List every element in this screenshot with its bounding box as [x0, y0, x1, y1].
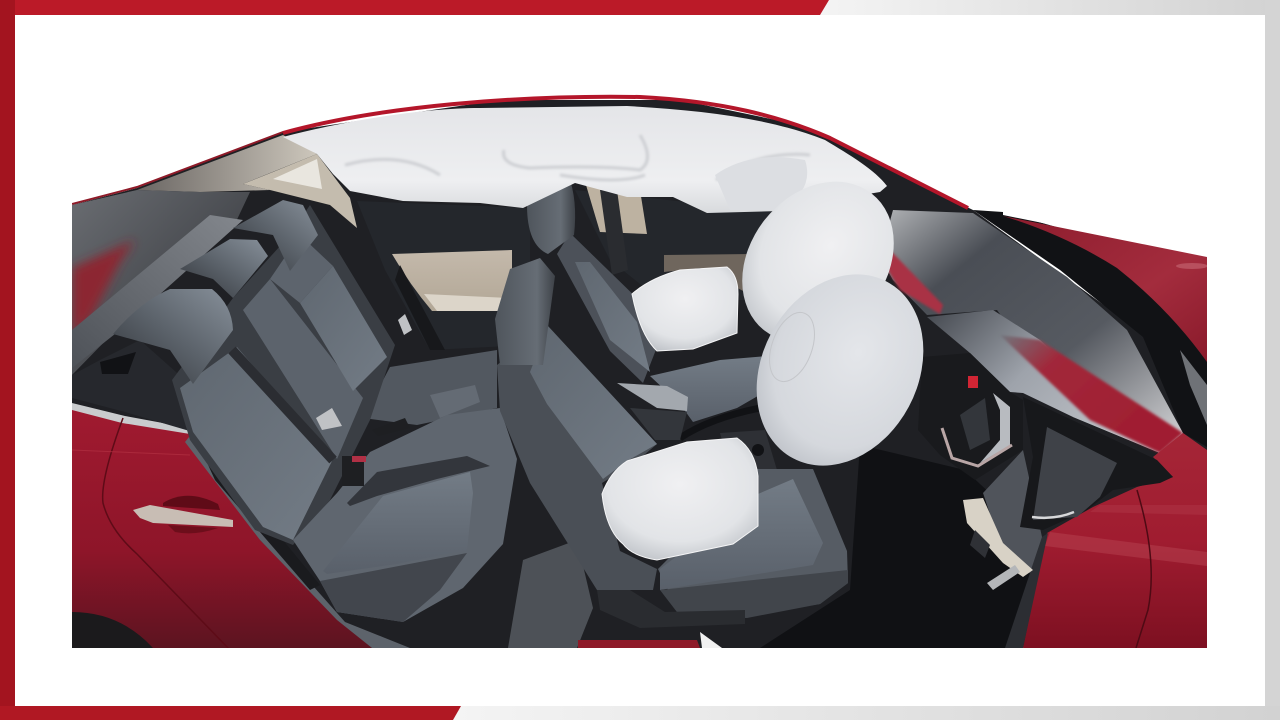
rear headrests — [113, 200, 318, 384]
far front seat — [527, 174, 767, 422]
car cutaway photo — [72, 97, 1208, 650]
sill dark grey — [185, 432, 410, 648]
dashboard red band — [1000, 335, 1183, 453]
near door red body, left — [72, 403, 372, 650]
window trim dark band — [72, 340, 193, 432]
front floor — [760, 445, 1040, 648]
door mirror — [1020, 397, 1173, 530]
dashboard red trim — [888, 252, 944, 315]
headliner beige — [137, 135, 357, 228]
inner door grey panel — [963, 450, 1042, 590]
steering wheel and console — [680, 405, 776, 469]
near front seat — [495, 258, 848, 628]
far door panels — [392, 186, 746, 350]
rear bench backrest — [172, 205, 412, 545]
centre floor — [508, 540, 593, 648]
curtain airbag — [283, 106, 887, 213]
white gap at sill — [700, 632, 722, 648]
far side airbag — [632, 267, 738, 351]
passenger front airbag — [742, 182, 894, 334]
roof red edge — [283, 97, 968, 208]
hood red — [1003, 216, 1207, 362]
interior base — [72, 100, 1207, 648]
trunk and rear deck — [72, 190, 250, 375]
rear bench cushion — [293, 408, 517, 622]
red sill strip — [578, 640, 700, 648]
door pillar edge — [1005, 533, 1048, 648]
instrument console — [940, 353, 1013, 478]
driver airbag — [756, 274, 924, 466]
dashboard lower silver — [927, 310, 1160, 453]
dashboard top — [880, 210, 1183, 453]
rear bench far cushion — [363, 350, 497, 425]
near side airbag — [602, 438, 758, 560]
front fender red — [1023, 433, 1207, 648]
windshield — [973, 210, 1207, 447]
white area above hood — [1003, 212, 1044, 224]
